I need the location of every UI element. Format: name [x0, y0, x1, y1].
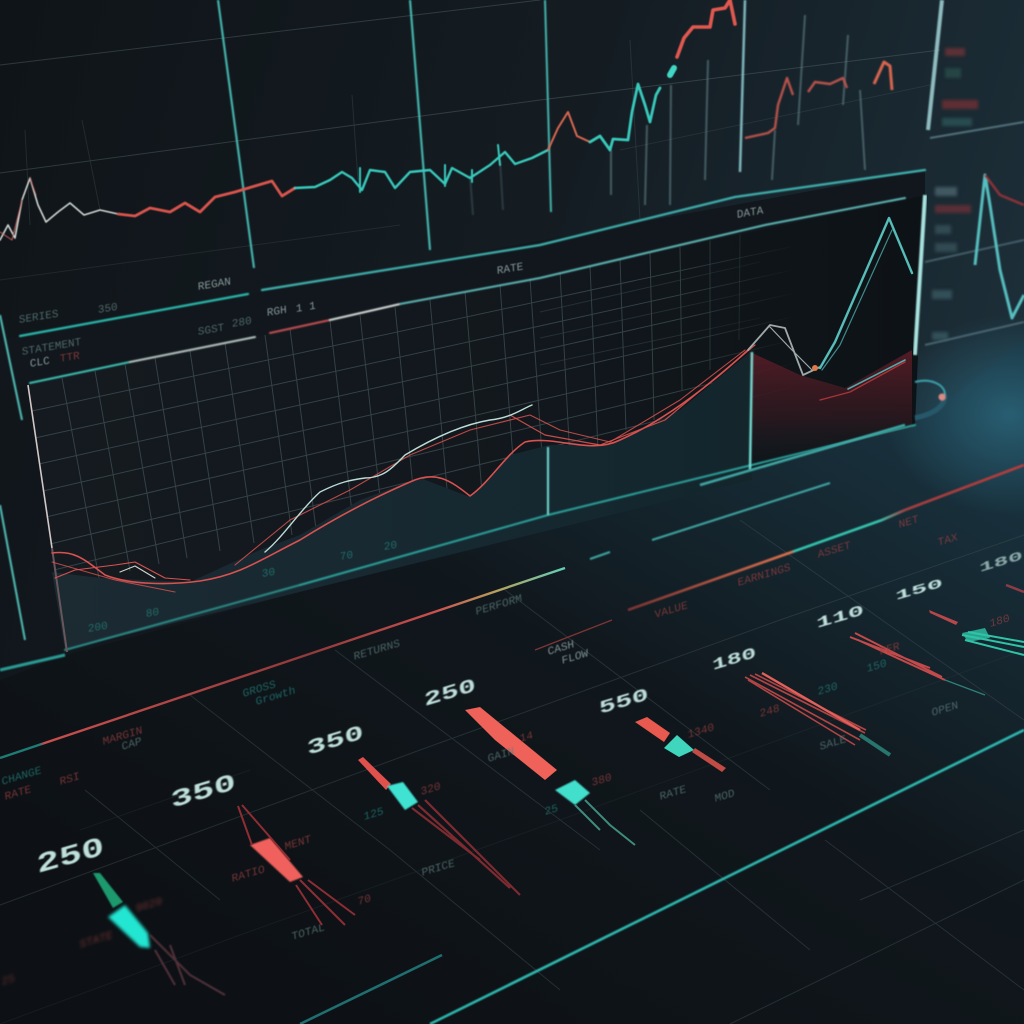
column labels: FLOW	[561, 648, 589, 668]
bottom left teal rail	[300, 955, 442, 1024]
column labels: TAX	[937, 532, 958, 550]
front screen labels: 1 1	[296, 301, 316, 316]
metric 6	[711, 645, 890, 755]
metric 7: 150	[866, 658, 887, 676]
right screen dividers	[925, 122, 1024, 345]
front screen labels: TTR	[60, 351, 80, 366]
front chart red curves	[52, 345, 905, 592]
separator line orange-teal-red	[628, 465, 1024, 610]
metric 4: 25	[544, 803, 559, 819]
metric 5	[598, 685, 735, 806]
column labels: ASSET	[817, 540, 852, 562]
metric 2	[169, 770, 372, 944]
column labels	[1, 514, 958, 804]
metric 2: MENT	[284, 834, 312, 854]
front screen labels: STATEMENT	[22, 337, 82, 359]
front screen labels: 280	[232, 316, 252, 331]
left frame	[0, 315, 65, 670]
metric 6: 180	[711, 645, 757, 675]
blue glow	[885, 315, 1024, 515]
front screen labels: RGH	[267, 305, 287, 320]
metric 6: SALE	[819, 734, 847, 754]
column labels: MARGIN	[102, 725, 143, 749]
metric 2: TOTAL	[291, 922, 326, 944]
metric 5: RATE	[659, 784, 687, 804]
front screen labels: 70	[340, 550, 353, 564]
metric 3: 320	[420, 781, 441, 799]
area fill under curve	[52, 352, 752, 650]
metric 7	[815, 602, 985, 720]
separator line red-teal	[0, 568, 565, 758]
red area fill	[750, 350, 912, 470]
metric 8	[895, 576, 1024, 655]
column labels: PERFORM	[475, 593, 523, 619]
front screen labels	[19, 206, 764, 636]
metric 7: OPEN	[931, 700, 959, 720]
metric 2: 350	[169, 770, 238, 816]
floor surface	[0, 340, 1024, 1024]
metric 5: MOD	[714, 788, 735, 806]
front chart white-teal curve	[120, 218, 912, 578]
front screen lower left edge	[52, 548, 67, 652]
metric 1: STATE	[79, 930, 114, 952]
front screen left edge	[28, 385, 52, 548]
teal highlight lines	[590, 425, 905, 559]
metric 5: 550	[598, 685, 650, 720]
panel: floor table	[0, 425, 1024, 1024]
metric 7: PER	[879, 641, 900, 659]
column labels: CHANGE	[1, 765, 42, 789]
metric 3: 125	[363, 806, 384, 824]
column labels: RSI	[59, 771, 80, 789]
front screen teal edge lines	[20, 170, 925, 650]
front screen labels: DATA	[737, 206, 764, 222]
metric 6: 230	[817, 681, 838, 699]
metric 1: 9020	[135, 896, 163, 916]
metric 1	[1, 832, 225, 995]
column labels: CAP	[121, 736, 142, 754]
column labels: RATE	[4, 784, 32, 804]
rear screen data stems	[470, 15, 865, 215]
column labels: EARNINGS	[737, 562, 791, 590]
front screen labels: RATE	[497, 262, 524, 278]
panel: right blurred screen	[925, 0, 1024, 345]
metric 2: RATIO	[231, 864, 266, 886]
metric 9	[978, 548, 1024, 592]
metric 1: 250	[35, 832, 106, 882]
right screen line chart	[975, 175, 1024, 318]
panel: front chart screen	[0, 170, 946, 652]
column labels: VALUE	[654, 600, 689, 622]
floor grid	[0, 520, 1024, 1024]
metric 7: 110	[815, 602, 865, 633]
metric 1: 25	[1, 973, 16, 989]
metric 9: 180	[978, 548, 1024, 576]
metric 3: PRICE	[421, 858, 456, 880]
front screen labels: 200	[88, 621, 108, 636]
metric 4: 14	[519, 730, 534, 746]
front screen right edge	[915, 195, 925, 355]
front screen labels: 20	[384, 540, 397, 554]
column labels: CASH	[547, 639, 575, 659]
column labels: NET	[898, 514, 919, 532]
front screen labels: SGST	[198, 323, 225, 339]
metric 4	[423, 675, 635, 845]
rear secondary red series	[745, 62, 892, 138]
bottom teal rail	[430, 730, 1024, 1024]
front chart vertical markers	[548, 352, 752, 515]
rear line chart	[0, 0, 735, 240]
metric 8: 150	[895, 576, 944, 604]
front screen labels: 350	[98, 302, 118, 317]
front screen labels: 30	[262, 567, 275, 581]
metric 4: GAIN	[487, 746, 515, 766]
metric 5: 1340	[687, 722, 715, 742]
faint red line	[535, 620, 612, 650]
right screen frame	[928, 0, 942, 130]
rear screen vertical dividers	[218, 0, 745, 268]
front screen labels: SERIES	[19, 309, 59, 327]
metric 8: 180	[989, 613, 1010, 631]
metric 3	[306, 722, 520, 895]
panel: rear chart screen	[0, 0, 940, 280]
rear screen grid lines	[0, 0, 940, 280]
front screen labels: REGAN	[198, 276, 231, 294]
right screen blurred labels	[932, 48, 978, 340]
front screen surface	[28, 195, 925, 650]
metric 4: 250	[423, 675, 477, 712]
column labels: Growth	[255, 685, 296, 709]
front screen header band	[0, 170, 925, 392]
front screen labels: 80	[146, 607, 159, 621]
metric 6: 248	[759, 703, 780, 721]
front screen grid	[32, 234, 776, 578]
column labels: GROSS	[242, 679, 277, 701]
metric 4: 380	[591, 772, 612, 790]
column labels: RETURNS	[353, 638, 401, 664]
ring indicator	[915, 381, 946, 418]
front screen labels: CLC	[30, 356, 50, 371]
metric 2: 70	[357, 893, 372, 909]
metric 3: 350	[306, 722, 365, 762]
